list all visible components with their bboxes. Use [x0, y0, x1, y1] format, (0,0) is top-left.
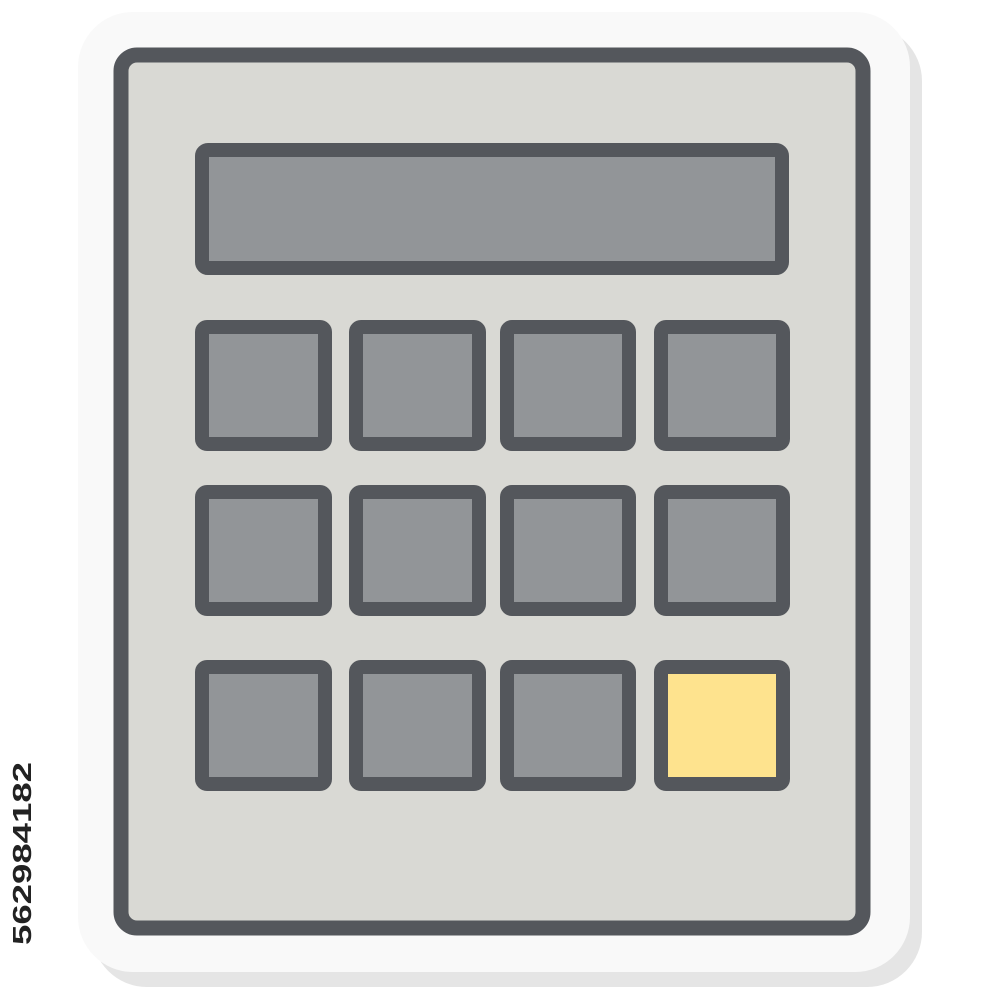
display [202, 150, 782, 268]
calculator body [121, 55, 863, 928]
stock id text: 562984182 [7, 762, 37, 945]
sticker background [78, 12, 910, 972]
sticker shadow [92, 26, 922, 987]
keypad buttons [202, 327, 783, 784]
